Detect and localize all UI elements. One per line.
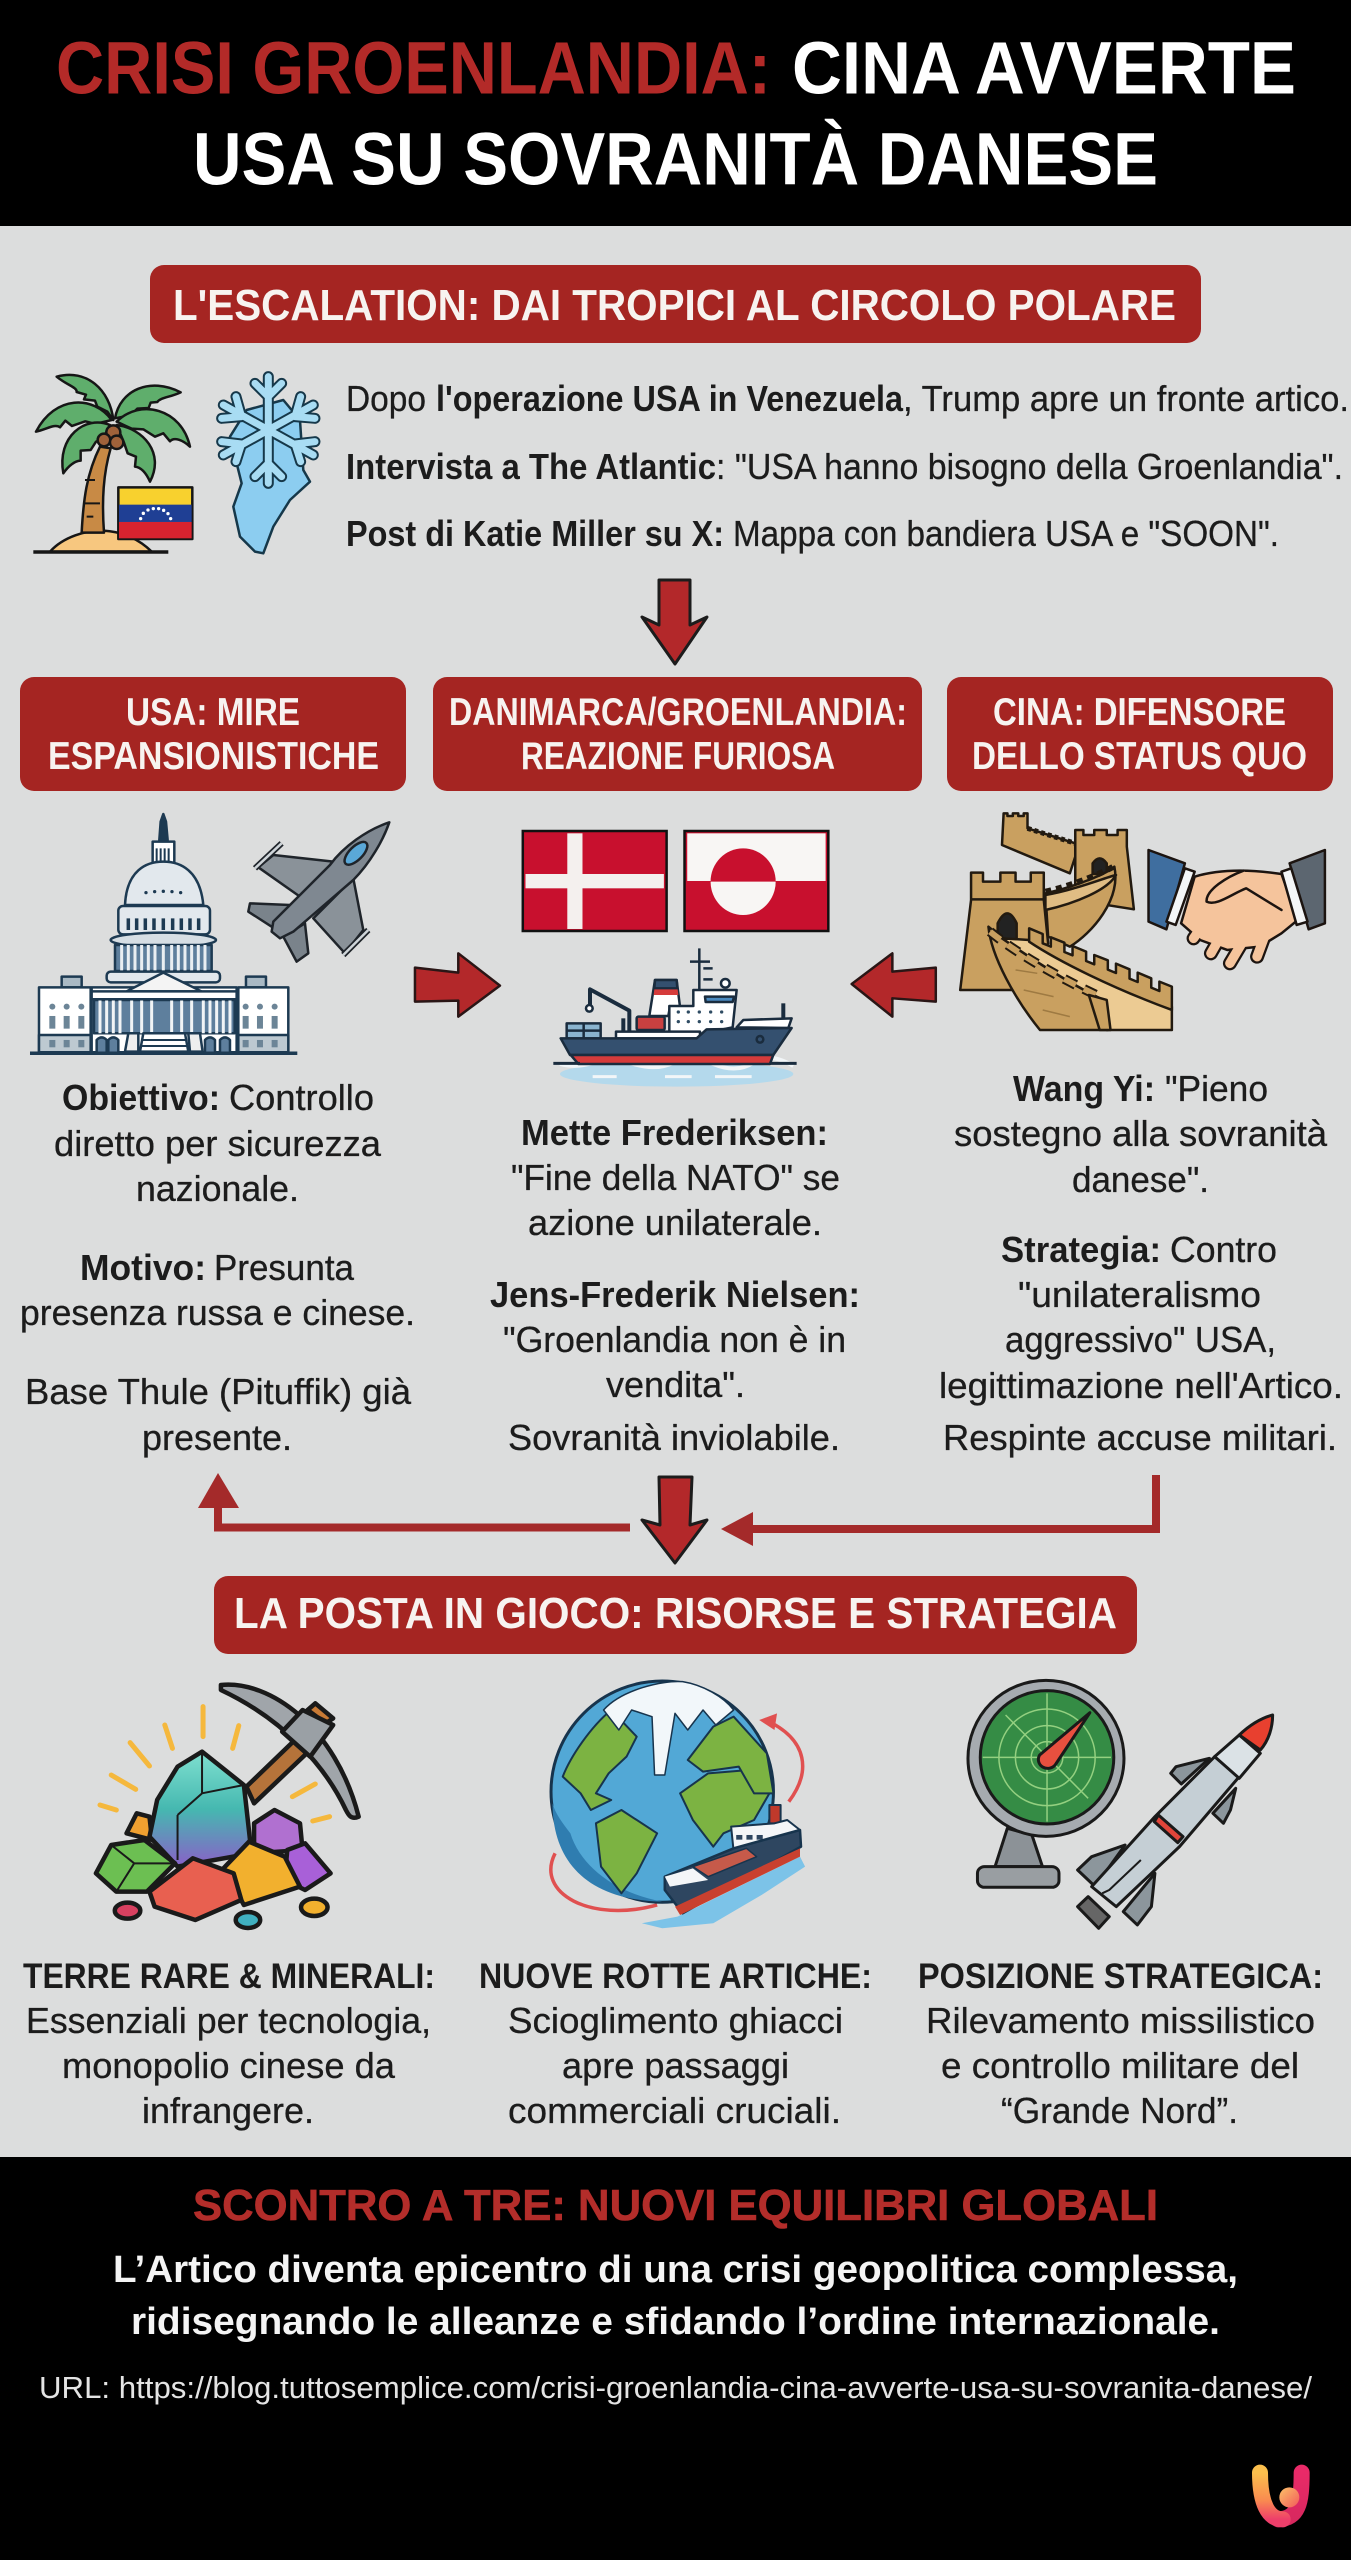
logo: [1260, 2473, 1302, 2519]
heading: Denmark and Greenland: DANIMARCA/GROENLANDIA:: [449, 691, 907, 734]
text block: China position: Respinte accuse militari.: [943, 1417, 1337, 1458]
panel: USA: [20, 677, 500, 1458]
heading: USA: USA: MIRE: [126, 691, 300, 734]
text block: Danish reactions: "Fine della NATO" se: [511, 1157, 840, 1198]
text block: rare earths: infrangere.: [142, 2090, 314, 2131]
icon: ship: [553, 948, 797, 1087]
footer text: L’Artico diventa epicentro di una crisi geopolitica complessa,: [113, 2249, 1238, 2291]
text block: China position: sostegno alla sovranità: [954, 1113, 1328, 1154]
title: CINA AVVERTE: [792, 26, 1296, 110]
footer heading: SCONTRO A TRE: NUOVI EQUILIBRI GLOBALI: [193, 2181, 1158, 2230]
text block: intro facts: Intervista a The Atlantic: [346, 446, 716, 487]
icon: Capitol building: [30, 814, 297, 1053]
text block: strategic position: Rilevamento missilistico: [926, 2000, 1315, 2041]
heading: stakes: LA POSTA IN GIOCO: RISORSE E STRATEGIA: [234, 1589, 1117, 1638]
heading: USA: ESPANSIONISTICHE: [48, 735, 379, 778]
panel: Denmark and Greenland: [433, 677, 922, 1458]
arrow: feedback right from China: [721, 1475, 1156, 1546]
heading: China: CINA: DIFENSORE: [993, 691, 1286, 734]
text block: intro facts: Dopo: [346, 378, 426, 419]
text block: USA objectives: diretto per sicurezza: [54, 1123, 382, 1164]
icon: minerals and pickaxe: [96, 1685, 359, 1928]
text block: rare earths: Essenziali per tecnologia,: [26, 2000, 431, 2041]
text block: Danish reactions: Mette Frederiksen:: [521, 1112, 828, 1153]
heading: USA: [20, 677, 406, 791]
text block: Arctic routes: NUOVE ROTTE ARTICHE:: [479, 1957, 872, 1996]
source URL: URL: https://blog.tuttosemplice.com/crisi-groenlandia-cina-avverte-usa-su-sovranita-danese/: [39, 2370, 1312, 2405]
text block: USA objectives: Presunta: [214, 1247, 355, 1288]
text block: China position: [939, 1068, 1343, 1458]
icon: Danish flag: [523, 831, 667, 931]
text block: strategic position: “Grande Nord”.: [1001, 2090, 1238, 2131]
heading: Denmark and Greenland: [433, 677, 922, 791]
footer text: [113, 2249, 1238, 2343]
text block: intro facts: l'operazione USA in Venezuela: [436, 378, 904, 419]
title: USA SU SOVRANITÀ DANESE: [193, 118, 1158, 200]
text block: China position: aggressivo" USA,: [1005, 1319, 1276, 1360]
icon: fighter jet: [248, 822, 389, 962]
text block: Danish reactions: Jens-Frederik Nielsen:: [490, 1274, 860, 1315]
text block: intro facts: Post di Katie Miller su X:: [346, 513, 724, 554]
icon: Greenland with snowflake: [222, 377, 315, 553]
text block: Danish reactions: Sovranità inviolabile.: [508, 1417, 840, 1458]
text block: China position: danese".: [1072, 1159, 1209, 1200]
footer panel: [0, 2157, 1351, 2560]
heading: escalation: L'ESCALATION: DAI TROPICI AL CIRCOLO POLARE: [173, 281, 1176, 330]
text block: USA objectives: Base Thule (Pituffik) già: [25, 1371, 412, 1412]
text block: China position: Contro: [1170, 1229, 1277, 1270]
text block: China position: legittimazione nell'Artico.: [939, 1365, 1343, 1406]
text block: Arctic routes: apre passaggi: [562, 2045, 789, 2086]
icon: globe with melting ice and ship: [551, 1681, 805, 1928]
icon: handshake: [1149, 850, 1325, 963]
text block: Arctic routes: commerciali cruciali.: [508, 2090, 841, 2131]
text block: China position: Wang Yi:: [1013, 1068, 1155, 1109]
text block: intro facts: Mappa con bandiera USA e "SOON".: [733, 513, 1279, 554]
text block: USA objectives: nazionale.: [136, 1168, 299, 1209]
text block: China position: Strategia:: [1001, 1229, 1161, 1270]
text block: strategic position: [918, 1957, 1323, 2131]
heading: escalation: [150, 265, 1201, 343]
footer text: ridisegnando le alleanze e sfidando l’ordine internazionale.: [131, 2301, 1220, 2343]
text block: Arctic routes: Scioglimento ghiacci: [508, 2000, 843, 2041]
text block: strategic position: POSIZIONE STRATEGICA:: [918, 1957, 1323, 1996]
arrow: feedback left to USA: [198, 1473, 630, 1528]
title: [56, 26, 1296, 200]
icon: Greenland flag: [685, 831, 828, 931]
text block: rare earths: TERRE RARE & MINERALI:: [23, 1957, 435, 1996]
panel: China: [852, 677, 1343, 1458]
text block: Danish reactions: azione unilaterale.: [528, 1202, 822, 1243]
header band: [0, 0, 1351, 226]
text block: Danish reactions: [490, 1112, 860, 1458]
text block: Danish reactions: "Groenlandia non è in: [503, 1319, 846, 1360]
text block: USA objectives: [20, 1077, 415, 1458]
text block: USA objectives: Obiettivo:: [62, 1077, 220, 1118]
arrow: down to actors: [642, 580, 707, 664]
icon: radar: [968, 1680, 1124, 1887]
text block: China position: "unilateralismo: [1018, 1274, 1261, 1315]
panel: escalation: [33, 265, 1349, 664]
text block: rare earths: [23, 1957, 435, 2131]
arrow: China to Denmark: [852, 953, 936, 1017]
heading: China: [947, 677, 1333, 791]
icon: Great Wall: [960, 813, 1172, 1030]
text block: USA objectives: Motivo:: [80, 1247, 206, 1288]
text block: USA objectives: Controllo: [229, 1077, 374, 1118]
text block: intro facts: [346, 378, 1349, 554]
icon: palm island with Venezuelan flag: [33, 375, 192, 552]
heading: Denmark and Greenland: REAZIONE FURIOSA: [521, 735, 835, 778]
text block: Arctic routes: [479, 1957, 872, 2131]
arrow: down to stakes: [642, 1477, 707, 1563]
title: CRISI GROENLANDIA:: [56, 26, 771, 110]
heading: stakes: [214, 1576, 1137, 1654]
text block: Danish reactions: vendita".: [606, 1364, 745, 1405]
text block: rare earths: monopolio cinese da: [62, 2045, 396, 2086]
arrow: USA to Denmark: [415, 953, 500, 1017]
text block: USA objectives: presenza russa e cinese.: [20, 1292, 415, 1333]
panel: stakes: [23, 1576, 1323, 2131]
text block: China position: "Pieno: [1165, 1068, 1268, 1109]
text block: strategic position: e controllo militare del: [941, 2045, 1299, 2086]
icon: missile: [1078, 1715, 1273, 1928]
text block: USA objectives: presente.: [142, 1417, 292, 1458]
